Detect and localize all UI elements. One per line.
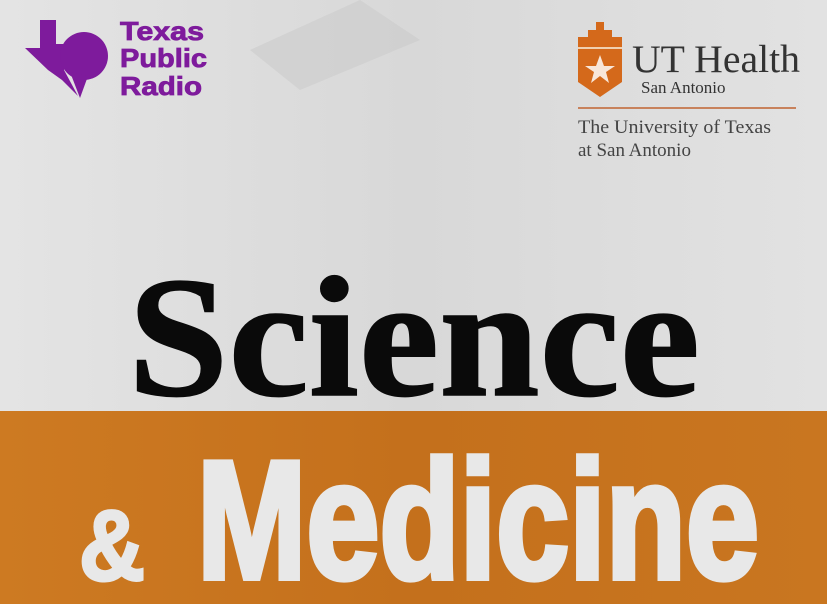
background photo area (0, 0, 827, 411)
title: Science: Science (128, 243, 700, 433)
text: Texas Public Radio (120, 16, 207, 101)
text: San Antonio: San Antonio (641, 78, 726, 97)
title: & Medicine: & (79, 490, 145, 602)
orange band (0, 411, 827, 604)
icon: texas + speech bubble (25, 20, 108, 98)
text: The University of Texas at San Antonio: at San Antonio (578, 140, 691, 161)
text: UT Health: UT Health (632, 38, 800, 81)
text: Texas Public Radio: Radio (120, 71, 202, 101)
text: Texas Public Radio: Texas (120, 16, 204, 46)
logo: Texas Public Radio (25, 16, 207, 101)
text: The University of Texas at San Antonio (578, 117, 771, 161)
logo: UT Health San Antonio (578, 22, 800, 161)
text: Texas Public Radio: Public (120, 43, 207, 73)
text: The University of Texas at San Antonio: The University of Texas (578, 117, 771, 138)
icon: shield with star (578, 22, 622, 97)
